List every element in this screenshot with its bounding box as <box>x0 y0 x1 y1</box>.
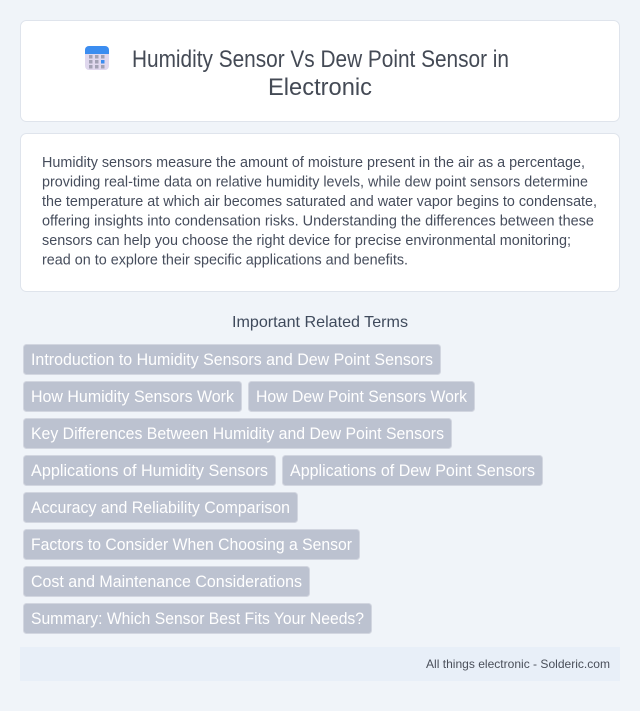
tag: summary <box>24 604 372 634</box>
tag: accuracy and reliability: Accuracy and Reliability Comparison <box>31 499 290 517</box>
tag: key differences: Key Differences Between Humidity and Dew Point Sensors <box>31 425 444 443</box>
heading: important related terms: Important Related Terms <box>232 314 408 331</box>
tag: factors to consider: Factors to Consider When Choosing a Sensor <box>31 536 352 554</box>
tag: applications of humidity sensors: Applications of Humidity Sensors <box>31 462 268 480</box>
tag: summary: Summary: Which Sensor Best Fits Your Needs? <box>31 610 364 628</box>
footer <box>20 647 620 681</box>
title <box>132 46 509 101</box>
tag: cost and maintenance: Cost and Maintenance Considerations <box>31 573 302 591</box>
tag: how humidity sensors work <box>24 382 242 412</box>
tag: key differences <box>24 418 452 448</box>
tag: how dew point sensors work <box>248 382 474 412</box>
tag: introduction <box>24 344 440 374</box>
tag: applications of humidity sensors <box>24 456 276 486</box>
icon: calendar <box>85 46 109 70</box>
tag: cost and maintenance <box>24 566 310 596</box>
text block: description: Humidity sensors measure the amount of moisture present in the air as a percentage, <box>42 155 585 171</box>
text block: description: sensors can help you choose the right device for precise environmental monitoring; <box>42 233 571 249</box>
text block: description: providing real-time data on relative humidity levels, while dew point sensors determine <box>42 174 588 190</box>
tag: how humidity sensors work: How Humidity Sensors Work <box>31 388 235 406</box>
text block: description: the temperature at which air becomes saturated and water vapor begins to condensate, <box>42 194 597 210</box>
tag: accuracy and reliability <box>24 492 298 522</box>
tag: applications of dew point sensors: Applications of Dew Point Sensors <box>290 462 535 480</box>
footer: All things electronic - Solderic.com <box>426 657 610 671</box>
panel: description <box>20 134 620 292</box>
panel: title card <box>20 20 620 122</box>
text block: description: read on to explore their specific applications and benefits. <box>42 252 408 268</box>
text block: description <box>42 155 597 268</box>
title: Humidity Sensor Vs Dew Point Sensor in <box>132 46 509 73</box>
tag: factors to consider <box>24 530 360 560</box>
text block: description: offering insights into condensation risks. Understanding the differences between these <box>42 214 594 230</box>
tag: applications of dew point sensors <box>282 456 542 486</box>
tag: how dew point sensors work: How Dew Point Sensors Work <box>256 388 468 406</box>
title: Electronic <box>268 74 372 101</box>
tag: introduction: Introduction to Humidity Sensors and Dew Point Sensors <box>31 351 433 369</box>
